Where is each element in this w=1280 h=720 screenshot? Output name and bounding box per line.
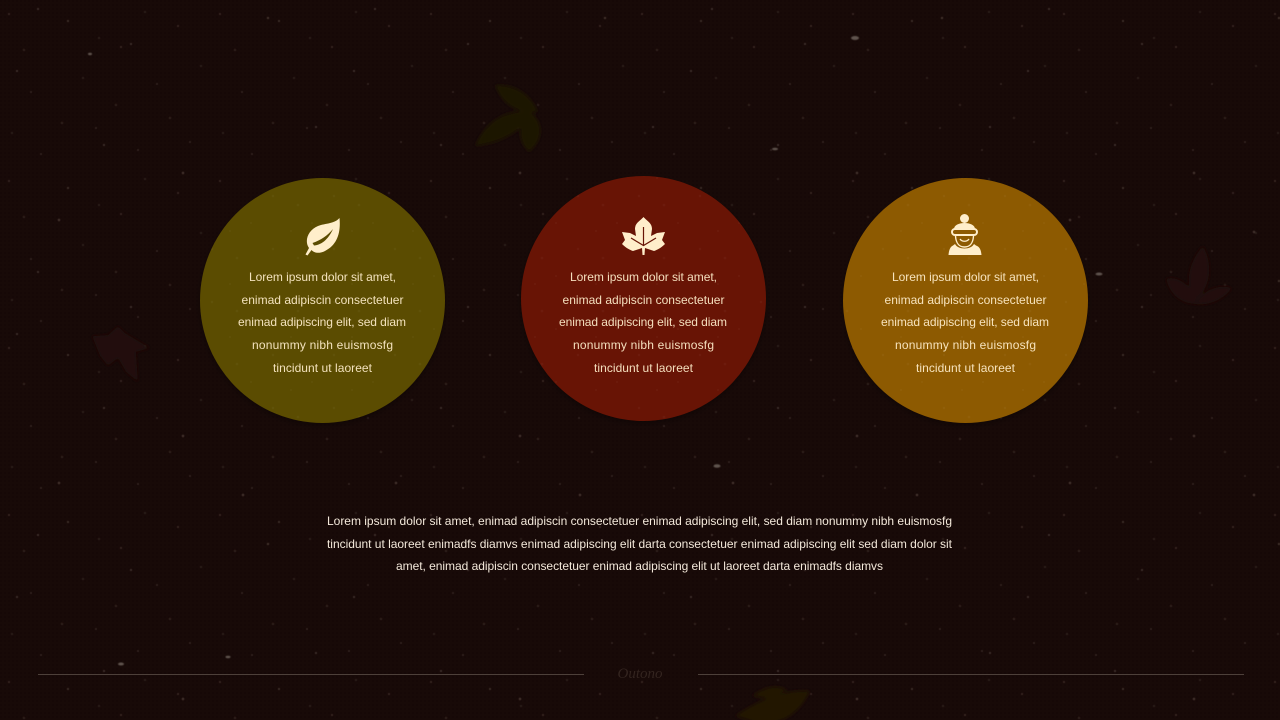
text: olive circle copy: enimad adipiscin consectetuer bbox=[242, 293, 404, 307]
text: red circle copy: enimad adipiscin consectetuer bbox=[562, 293, 724, 307]
decorative leaf: top olive bbox=[475, 85, 540, 152]
text block: bottom paragraph: Lorem ipsum dolor sit amet, enimad adipiscin consectetuer enimad adipiscing elit, sed diam nonummy nibh euismosfg bbox=[327, 514, 952, 528]
text: olive circle copy bbox=[238, 270, 406, 375]
text: olive circle copy: nonummy nibh euismosfg bbox=[252, 338, 393, 352]
text: red circle copy: tincidunt ut laoreet bbox=[594, 361, 694, 375]
text: red circle copy: Lorem ipsum dolor sit amet, bbox=[570, 270, 717, 284]
text: red circle copy bbox=[559, 270, 727, 375]
text: red circle copy: enimad adipiscing elit, sed diam bbox=[559, 315, 727, 329]
text: amber circle copy bbox=[881, 270, 1049, 375]
text block: bottom paragraph: tincidunt ut laoreet enimadfs diamvs enimad adipiscing elit darta consectetuer enimad adipiscing elit sed diam dolor sit bbox=[327, 537, 953, 551]
panel: amber circle bbox=[843, 178, 1088, 426]
text: amber circle copy: nonummy nibh euismosfg bbox=[895, 338, 1036, 352]
footer line right bbox=[698, 674, 1244, 675]
text block: bottom paragraph: amet, enimad adipiscin consectetuer enimad adipiscing elit ut laoreet darta enimadfs diamvs bbox=[396, 559, 883, 573]
text: amber circle copy: enimad adipiscin consectetuer bbox=[884, 293, 1046, 307]
text: amber circle copy: Lorem ipsum dolor sit amet, bbox=[892, 270, 1039, 284]
text: amber circle copy: enimad adipiscing elit, sed diam bbox=[881, 315, 1049, 329]
text: amber circle copy: tincidunt ut laoreet bbox=[916, 361, 1016, 375]
panel: red circle bbox=[521, 176, 766, 424]
text: olive circle copy: enimad adipiscing elit, sed diam bbox=[238, 315, 406, 329]
icon: maple leaf bbox=[622, 217, 665, 255]
panel: olive circle bbox=[200, 178, 445, 426]
text: red circle copy: nonummy nibh euismosfg bbox=[573, 338, 714, 352]
icon: leaf bbox=[306, 218, 340, 256]
decorative leaf: right red bbox=[1166, 246, 1232, 304]
footer label: Outono bbox=[618, 666, 663, 682]
icon: person in winter hat bbox=[948, 214, 982, 255]
decorative leaf: left red bbox=[92, 326, 150, 382]
decorative leaf: bottom amber bbox=[735, 687, 810, 720]
footer line left bbox=[38, 674, 584, 675]
text block: bottom paragraph bbox=[327, 514, 953, 573]
text: olive circle copy: tincidunt ut laoreet bbox=[273, 361, 373, 375]
text: olive circle copy: Lorem ipsum dolor sit amet, bbox=[249, 270, 396, 284]
